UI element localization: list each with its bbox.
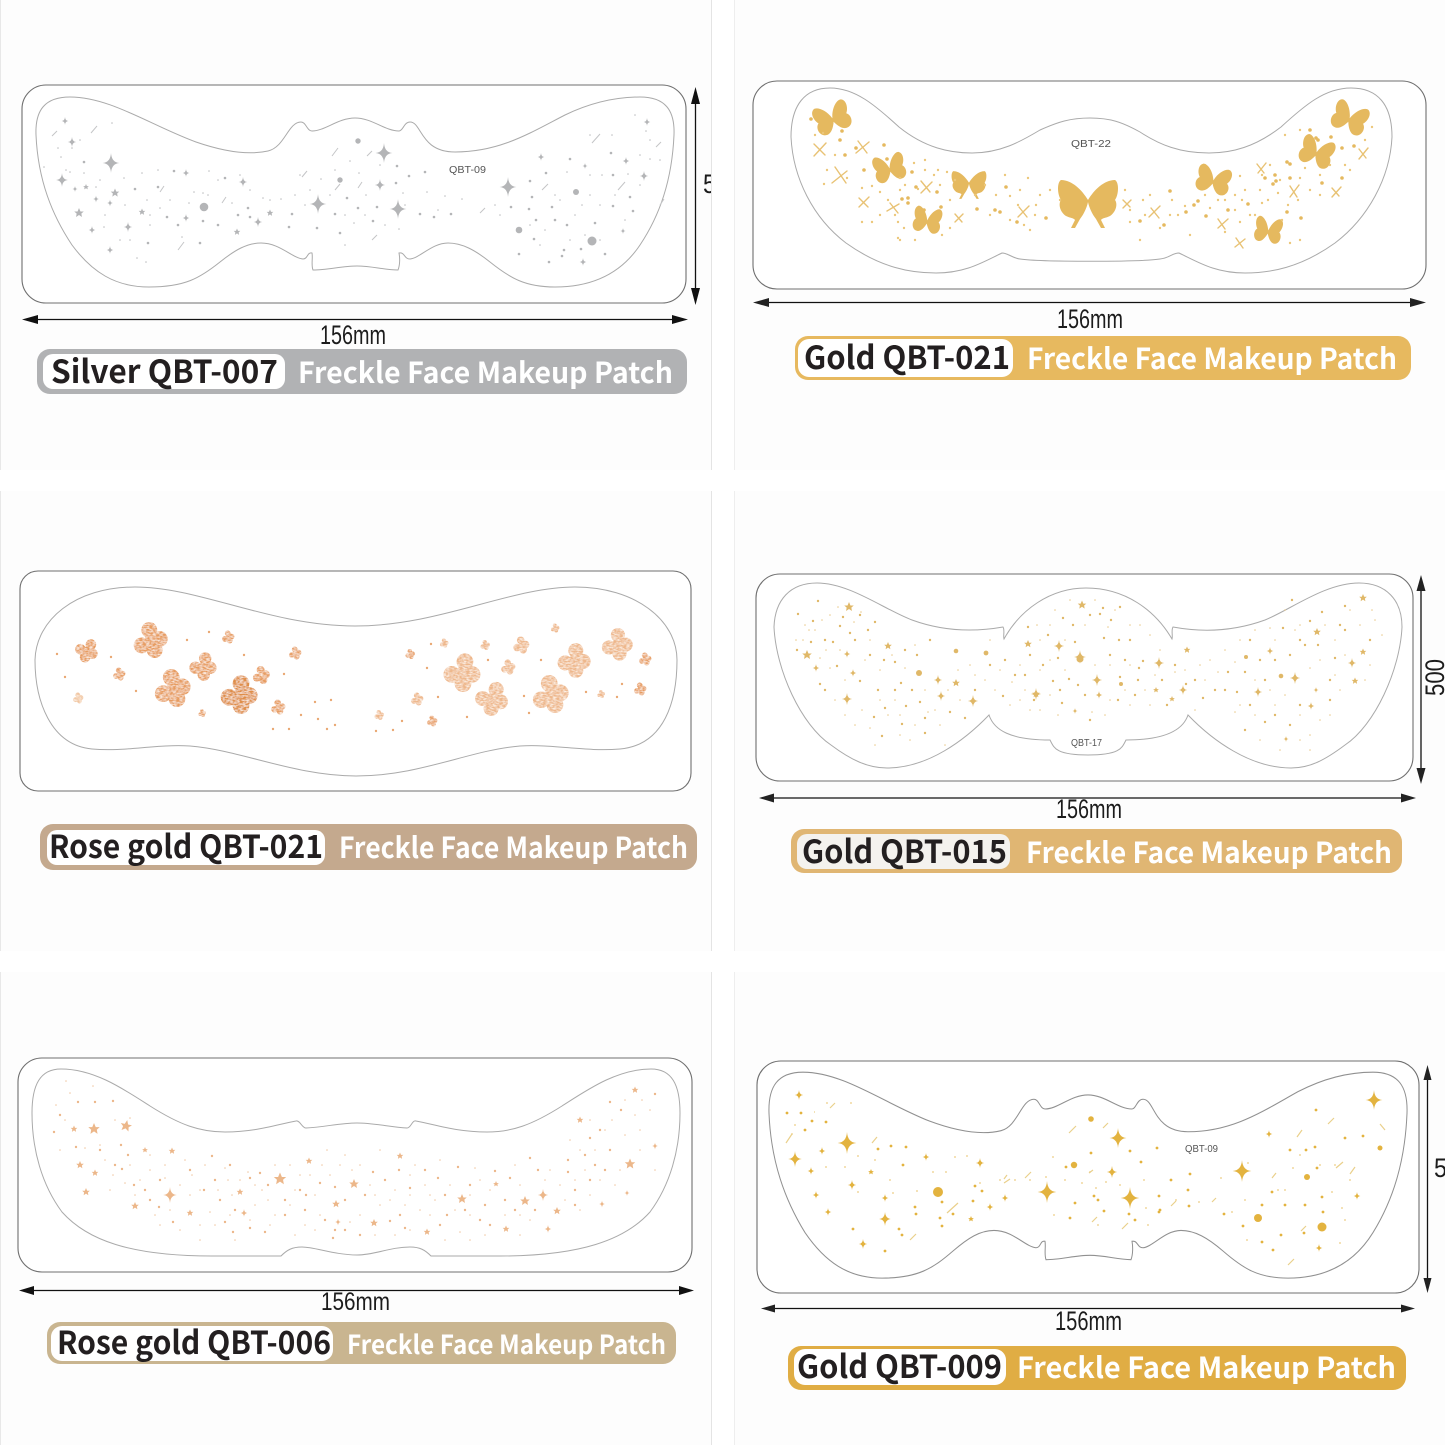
- width arrow: [766, 797, 1408, 799]
- width label: 156mm: [1057, 304, 1123, 334]
- patch code: QBT-17: [1071, 738, 1102, 749]
- panel: Gold QBT-015: [756, 574, 1445, 873]
- patch sheet outline: [753, 81, 1426, 289]
- product label: Freckle Face Makeup Patch: [347, 1325, 666, 1362]
- width arrow: [26, 1290, 686, 1292]
- product label: [37, 347, 687, 394]
- patch shape: [36, 97, 674, 287]
- patch code: QBT-09: [449, 165, 486, 176]
- product label: [788, 1342, 1406, 1390]
- patch shape: [769, 1072, 1407, 1278]
- width arrow: [30, 318, 680, 320]
- panel: Gold QBT-009: [757, 1061, 1445, 1390]
- width arrow: [760, 302, 1418, 304]
- product label: Freckle Face Makeup Patch: [1027, 336, 1397, 378]
- panel: Silver QBT-007: [22, 85, 716, 394]
- patch shape: [791, 88, 1392, 273]
- butterfly pattern: [810, 98, 1371, 245]
- panel: Rose gold QBT-006: [18, 1058, 694, 1364]
- panel: Gold QBT-021: [753, 81, 1426, 380]
- width arrow: [769, 1308, 1407, 1310]
- patch sheet outline: [757, 1061, 1419, 1293]
- height arrow: [694, 95, 696, 297]
- patch shape: [774, 583, 1402, 768]
- rose gold star pattern: [71, 1086, 658, 1235]
- product label: [40, 822, 697, 870]
- product label: [791, 827, 1402, 873]
- width label: 156mm: [320, 320, 386, 350]
- product label: [795, 333, 1411, 380]
- patch sheet outline: [18, 1058, 692, 1272]
- width label: 156mm: [1055, 1306, 1122, 1336]
- patch sheet outline: [756, 574, 1413, 781]
- product label: Gold QBT-009: [797, 1342, 1002, 1388]
- gold sparkle pattern: [788, 1090, 1382, 1252]
- product label: Gold QBT-015: [802, 827, 1007, 873]
- product label: Freckle Face Makeup Patch: [339, 825, 688, 867]
- product label: Freckle Face Makeup Patch: [1026, 830, 1392, 872]
- product label: Gold QBT-021: [804, 333, 1010, 379]
- column gutter: [0, 0, 735, 1445]
- patch sheet outline: [20, 571, 691, 791]
- product label: [47, 1318, 676, 1364]
- height arrow: [1426, 1072, 1428, 1288]
- product label: Rose gold QBT-006: [57, 1318, 331, 1364]
- panel: Rose gold QBT-021: [20, 571, 697, 870]
- rose gold flower pattern: [71, 622, 651, 726]
- height arrow: [1420, 582, 1422, 776]
- gold star pattern: [802, 594, 1367, 742]
- product label: Silver QBT-007: [51, 347, 278, 393]
- silver freckle pattern: [56, 117, 650, 266]
- product label: Freckle Face Makeup Patch: [298, 350, 673, 392]
- patch code: QBT-09: [1185, 1144, 1218, 1155]
- patch shape: [32, 1069, 680, 1256]
- patch sheet outline: [22, 85, 686, 303]
- product label: Rose gold QBT-021: [49, 822, 323, 868]
- clipped height label: 5: [703, 169, 716, 199]
- product label: Freckle Face Makeup Patch: [1017, 1345, 1396, 1387]
- width label: 156mm: [1056, 794, 1122, 824]
- patch code: QBT-22: [1071, 139, 1111, 150]
- width label: 156mm: [321, 1288, 390, 1316]
- patch shape: [35, 587, 677, 776]
